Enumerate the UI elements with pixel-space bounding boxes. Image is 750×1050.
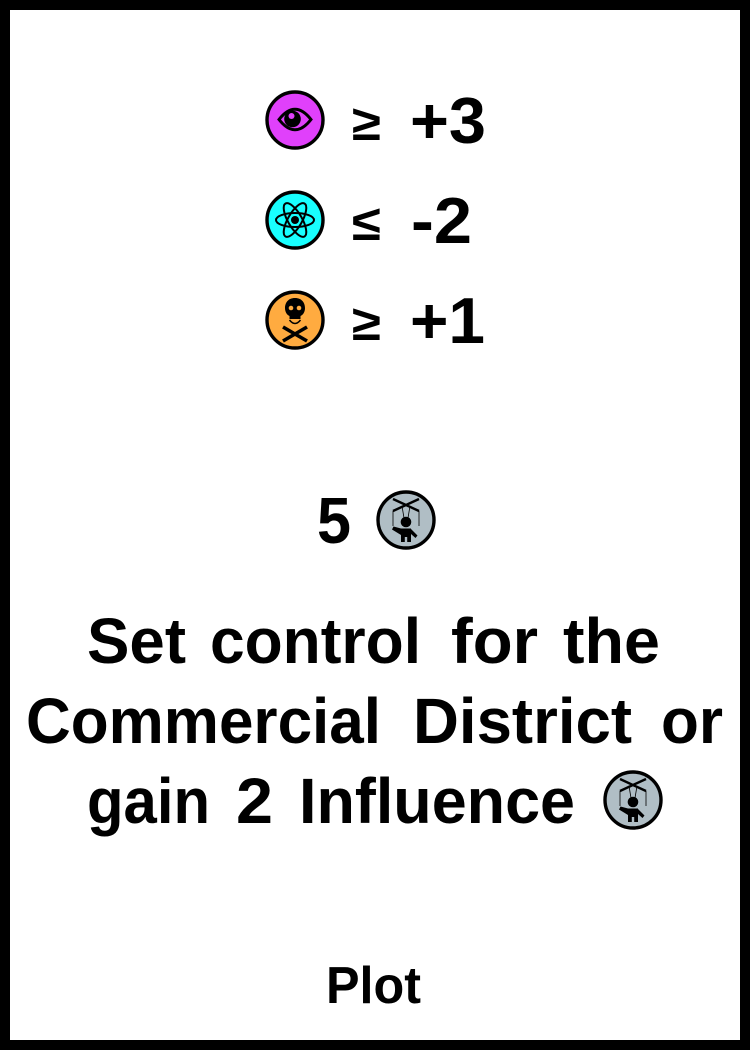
value: +3: +3 (410, 84, 486, 157)
symbol: at least: ≥ (352, 295, 381, 351)
line 1: for (451, 605, 538, 677)
symbol: at least: ≥ (352, 95, 381, 151)
card type label: Plot (326, 957, 421, 1015)
icon: skull and crossbones (267, 292, 323, 348)
line 2 (26, 685, 723, 757)
value: -2: -2 (411, 184, 472, 257)
symbol: at most: ≤ (352, 195, 381, 251)
cost: 5 influence (317, 484, 434, 557)
effect text (26, 605, 723, 837)
line 3 (87, 765, 661, 837)
line 3: gain (87, 765, 210, 837)
line 2: District (413, 685, 632, 757)
line 1: Set (87, 605, 186, 677)
icon: puppet (605, 772, 661, 828)
icon: puppet (378, 492, 434, 548)
icon: atom (267, 192, 323, 248)
line 1: the (563, 605, 660, 677)
requirement: atom -2 (267, 184, 472, 257)
line 1 (87, 605, 660, 677)
value: +1: +1 (410, 284, 485, 357)
line 1: control (210, 605, 421, 677)
line 3: 2 (236, 765, 273, 837)
line 3: Influence (299, 765, 575, 837)
requirement: eye +3 (267, 84, 486, 157)
requirement: skull +1 (267, 284, 485, 357)
icon: eye (267, 92, 323, 148)
line 2: Commercial (26, 685, 381, 757)
line 2: or (661, 685, 723, 757)
value: 5: 5 (317, 484, 351, 557)
